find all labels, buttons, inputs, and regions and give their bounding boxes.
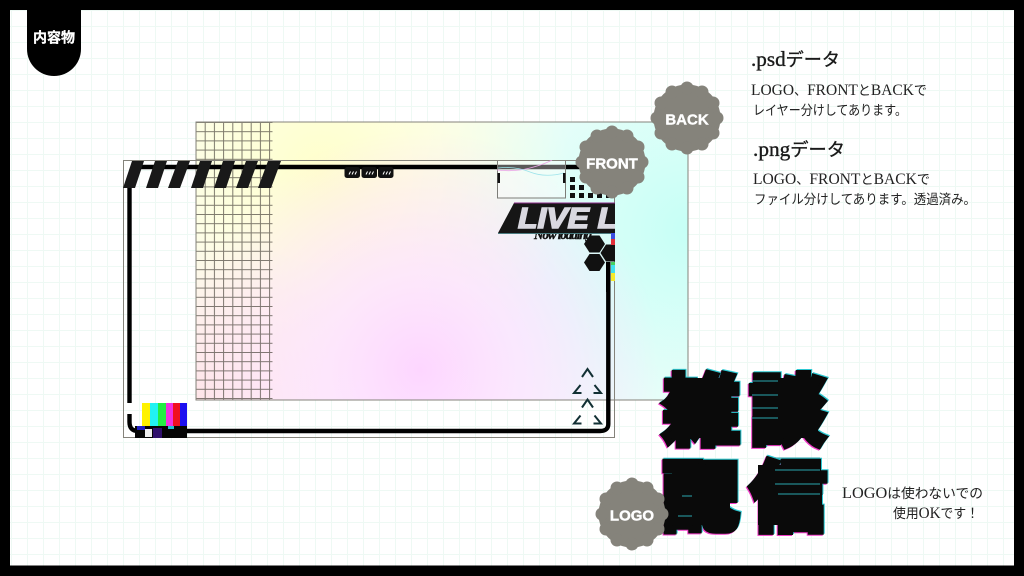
logo magenta offset: 雑 <box>661 351 739 463</box>
logo black lettering <box>662 350 827 548</box>
text: png heading: .pngデータ <box>753 137 845 161</box>
dot matrix <box>570 177 611 198</box>
text: png description: LOGO、FRONTとBACKで <box>753 171 930 188</box>
logo: 雑談配信 <box>661 349 828 549</box>
LIVE banner: LIVE LI <box>518 203 627 235</box>
triangle markers <box>574 369 601 424</box>
logo cyan offset <box>663 349 828 547</box>
now loading script: Now loading <box>533 227 592 242</box>
logo black lettering: 雑 <box>662 350 740 462</box>
logo cyan offset: 談 <box>750 349 828 461</box>
text: psd description: レイヤー分けしてあります。 <box>753 103 907 118</box>
logo magenta offset: 信 <box>748 437 826 549</box>
logo magenta offset <box>661 351 826 549</box>
logo cyan offset: 配 <box>663 435 741 547</box>
tab: 内容物 <box>27 10 81 76</box>
top tabs <box>344 167 394 178</box>
text: logo note: LOGOは使わないでの <box>842 485 983 502</box>
text: png description: ファイル分けしてあります。透過済み。 <box>754 192 976 207</box>
diagonal stripes <box>123 161 281 188</box>
black frame line <box>130 167 608 431</box>
badge: LOGO <box>596 478 668 550</box>
logo counter fill <box>672 378 818 525</box>
logo magenta offset: 談 <box>748 351 826 463</box>
logo black lettering: 配 <box>662 436 740 548</box>
text: logo note <box>842 485 983 522</box>
text: logo note: 使用OKです！ <box>893 505 979 522</box>
grid strip <box>196 122 272 400</box>
panel: FRONT layer <box>123 160 627 438</box>
text: psd description <box>751 82 927 118</box>
badge: FRONT: FRONT <box>586 156 638 172</box>
badge: FRONT <box>576 126 648 198</box>
text: psd heading: .psdデータ <box>751 47 840 71</box>
logo cyan offset: 雑 <box>663 349 741 461</box>
top-right box with wavy lines <box>497 160 566 198</box>
logo black lettering: 談 <box>749 350 827 462</box>
hexagons <box>584 236 615 271</box>
badge: LOGO: LOGO <box>610 508 654 524</box>
logo magenta offset: 配 <box>661 437 739 549</box>
text: psd description: LOGO、FRONTとBACKで <box>751 82 927 99</box>
panel: BACK layer <box>196 122 688 400</box>
badge: BACK: BACK <box>665 112 709 128</box>
colour bars <box>135 403 187 438</box>
badge: BACK <box>650 82 724 154</box>
colour strip <box>606 233 615 292</box>
text: png description <box>753 171 976 207</box>
tab: 内容物: 内容物 <box>33 30 75 46</box>
logo cyan offset: 信 <box>750 435 828 547</box>
logo black lettering: 信 <box>749 436 827 548</box>
logo highlight strokes <box>678 381 820 516</box>
